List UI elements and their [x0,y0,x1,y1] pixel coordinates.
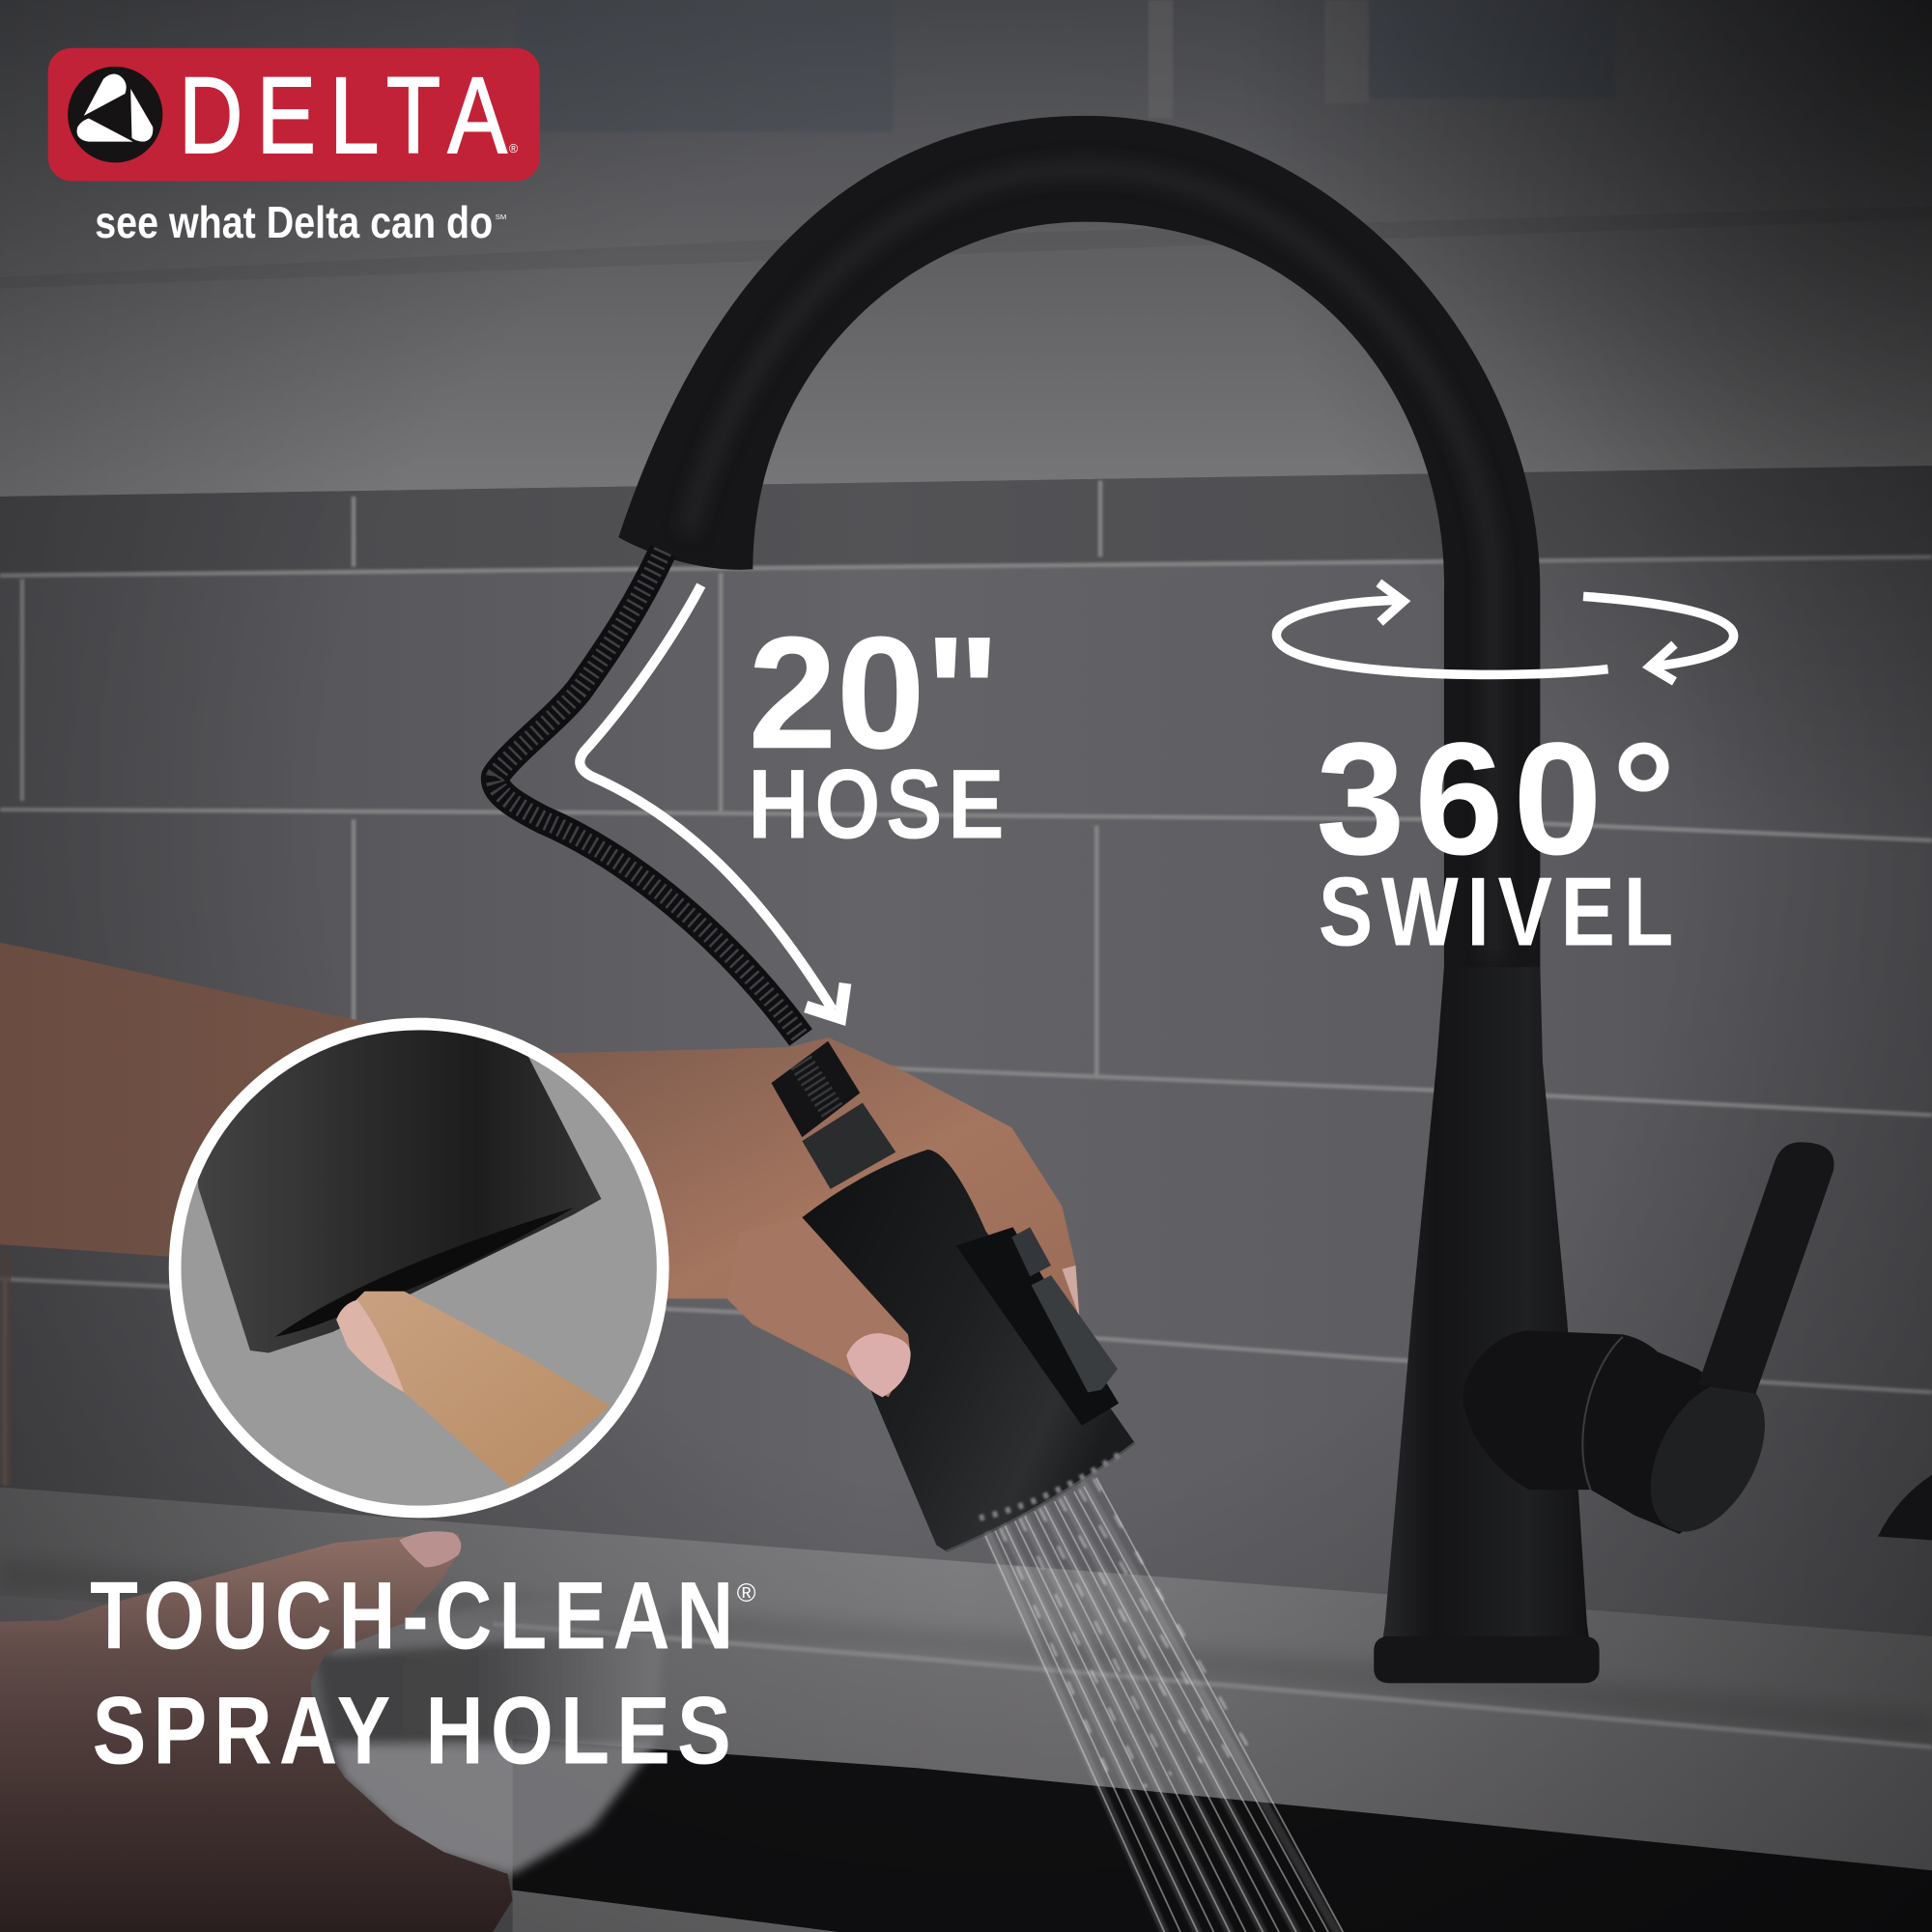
countertop surface [0,1488,1932,1749]
lever [1698,1142,1834,1394]
heading: 360 swivel: 360° [1316,710,1676,889]
fingertip [336,1292,610,1488]
water highlights [1001,1480,1257,1786]
water stream bands [988,1486,1337,1932]
hub seam [1582,1337,1623,1490]
braided hose [496,551,801,1037]
hand and fingers [542,1037,1079,1331]
swivel rotation arrows [1276,582,1734,681]
heading: touch-clean spray holes: TOUCH-CLEAN [90,1563,733,1670]
water thin streams [985,1479,1343,1932]
gooseneck spout [618,116,1540,974]
top button [1011,1227,1051,1276]
callout: touch-clean detail circle [175,985,663,1512]
tagline: see what Delta can do [95,197,493,247]
top right corner shade [1233,0,1932,863]
nozzle dots [980,1452,1123,1518]
logo red badge [48,48,540,181]
counter shadow band [0,1559,1932,1737]
head body [802,1150,1135,1551]
head rim highlight [947,1443,1135,1551]
bowl rim [332,1600,670,1656]
heading: touch-clean spray holes [90,1563,756,1784]
pull-down spray head [771,1041,1135,1551]
spray face close-up [197,1030,601,1352]
fingernail behind head [1062,1265,1079,1318]
tile grout lines [0,480,1932,1485]
hose length arrow [580,585,845,1018]
heading: touch-clean spray holes: SPRAY HOLES [93,1677,731,1784]
heading: 20 inch hose: 20" [748,604,1001,782]
connector ribs [801,1062,833,1112]
collar [802,1103,895,1189]
logo emblem [68,67,162,162]
registered mark: ® [509,141,519,156]
Delta logo [48,48,540,181]
bowl upper dark area [316,1633,663,1745]
tagline: SM [496,213,506,221]
water spray [985,1479,1343,1932]
button housing [956,1227,1119,1426]
faucet base column [1382,967,1589,1641]
foreground hand holding bowl [0,1534,513,1932]
logo wordmark: DELTA [179,54,507,176]
thumbnail [846,1333,911,1397]
counter lip highlight [493,1624,1932,1747]
foreground fingernail [399,1531,461,1567]
spray button [1032,1275,1118,1392]
spout highlight [688,169,1493,961]
fingernail [336,1300,404,1392]
handle hub [1463,1331,1762,1534]
heading: 20 inch hose [748,604,1005,860]
thumb [727,1217,911,1397]
sink basin [513,1739,1932,1932]
heading: 360 swivel: SWIVEL [1319,857,1673,966]
glass bowl [316,1600,670,1874]
heading: touch-clean spray holes: ® [737,1578,756,1607]
heading: 360 swivel [1316,710,1676,966]
connector [771,1041,860,1137]
left edge cabinet [0,1251,11,1485]
lower counter strip [513,1890,838,1932]
base ring [1374,1636,1600,1683]
forearm [0,943,666,1257]
heading: 20 inch hose: HOSE [748,750,1005,860]
bowl lower light area [332,1745,656,1874]
faucet body and spout [618,116,1834,1683]
far right fixture [1878,1475,1932,1540]
spray face opening [274,1208,574,1337]
handle disc [1627,1362,1788,1550]
counter front face [0,1596,1932,1873]
